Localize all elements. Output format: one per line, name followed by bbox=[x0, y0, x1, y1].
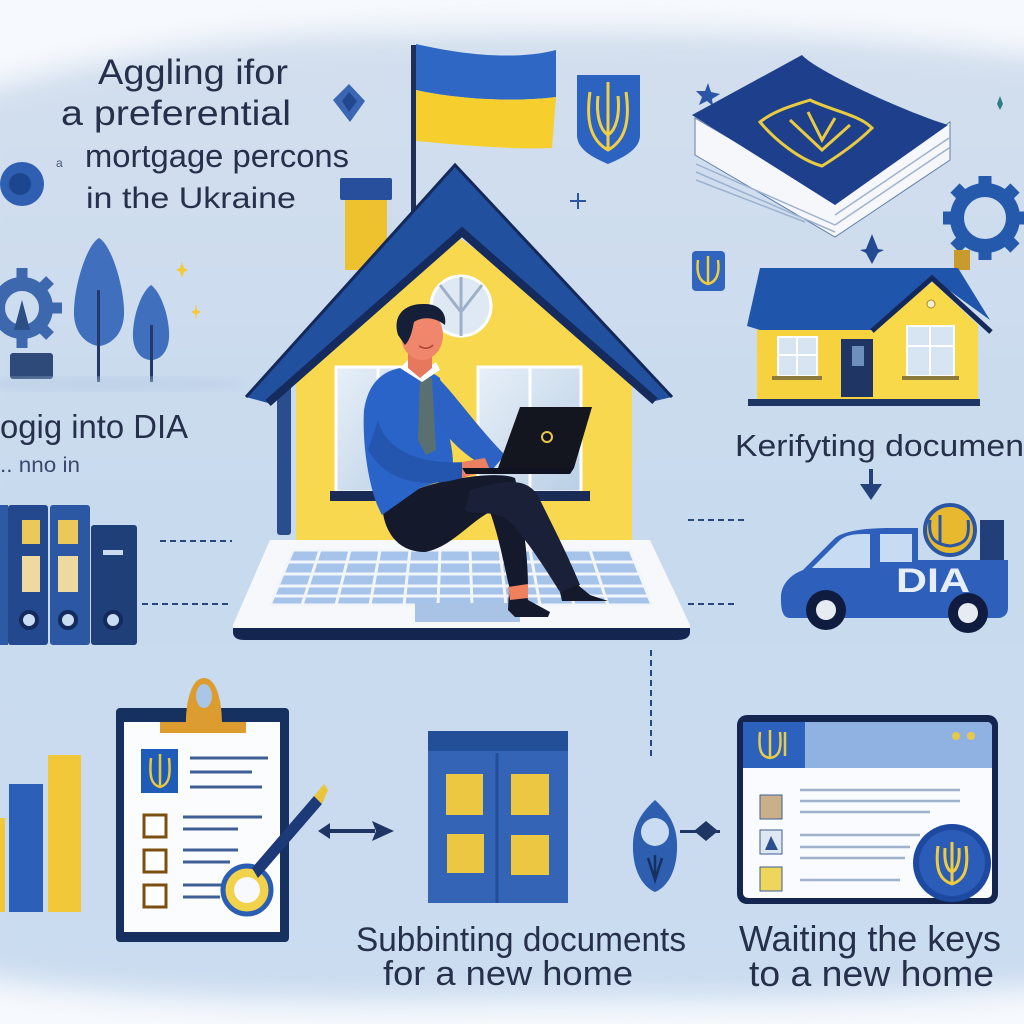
text: submitting documents: Subbinting documents bbox=[356, 921, 686, 959]
side shadow bbox=[277, 380, 291, 535]
title: mortgage percons bbox=[85, 138, 349, 174]
laptop screen bbox=[462, 407, 592, 474]
left window bbox=[330, 367, 430, 501]
legs bbox=[382, 475, 528, 590]
text: waiting the keys: Waiting the keys bbox=[739, 918, 1001, 959]
arrow between clipboard and window bbox=[318, 821, 394, 841]
right window bbox=[470, 367, 590, 501]
icon: trees bbox=[0, 238, 250, 388]
feet bbox=[508, 587, 550, 617]
hand bbox=[462, 458, 490, 478]
building window panel bbox=[428, 731, 568, 903]
icon: passport booklet bbox=[692, 55, 950, 237]
person with laptop bbox=[364, 304, 608, 617]
dashed connectors bbox=[142, 520, 745, 760]
title: a preferential bbox=[61, 94, 291, 133]
torso bbox=[364, 367, 453, 515]
icon: decorative stars bbox=[176, 83, 1003, 320]
icon: binders bbox=[0, 505, 137, 645]
browser window bbox=[737, 715, 998, 904]
text: submitting documents: for a new home bbox=[383, 955, 633, 993]
title: Aggling ifor bbox=[98, 53, 288, 92]
roof bbox=[246, 165, 672, 403]
text: logging into DIA: .. nno in bbox=[0, 454, 80, 477]
small house at right bbox=[747, 250, 991, 406]
text: submitting documents bbox=[356, 921, 686, 993]
small trident emblem bbox=[692, 251, 725, 291]
clipboard checklist bbox=[116, 678, 328, 942]
delivery van labelled DIA bbox=[781, 505, 1008, 633]
neck and head bbox=[408, 345, 432, 378]
tie bbox=[418, 378, 436, 455]
icon: key tag bbox=[633, 800, 677, 892]
title: a bbox=[56, 156, 63, 170]
icon: small blue gem bbox=[333, 84, 365, 122]
chimney bbox=[340, 178, 392, 270]
flag of Ukraine bbox=[411, 44, 556, 240]
text: waiting the keys bbox=[739, 918, 1001, 994]
arrow down bbox=[860, 469, 882, 500]
icon: gear left with plant pot bbox=[0, 268, 62, 379]
delivery van labelled DIA: DIA bbox=[896, 562, 970, 600]
round window bbox=[431, 276, 491, 336]
icon: trident shield bbox=[577, 75, 640, 164]
central house bbox=[246, 165, 672, 540]
laptop base bbox=[233, 540, 690, 640]
arm bbox=[430, 380, 505, 470]
text: logging into DIA: ogig into DIA bbox=[0, 408, 188, 445]
icon: gear right bbox=[943, 176, 1024, 260]
text: logging into DIA bbox=[0, 408, 188, 477]
icon: small blue circle at left bbox=[0, 162, 44, 206]
magnifier and pen bbox=[223, 784, 328, 914]
text: verifying documents: Kerifyting documen bbox=[735, 428, 1024, 463]
text: waiting the keys: to a new home bbox=[749, 953, 994, 994]
title bbox=[56, 53, 349, 215]
arrow to browser bbox=[680, 821, 720, 841]
bar chart bbox=[0, 755, 81, 912]
house walls bbox=[296, 238, 632, 540]
title: in the Ukraine bbox=[86, 182, 296, 215]
collar bbox=[400, 360, 440, 382]
